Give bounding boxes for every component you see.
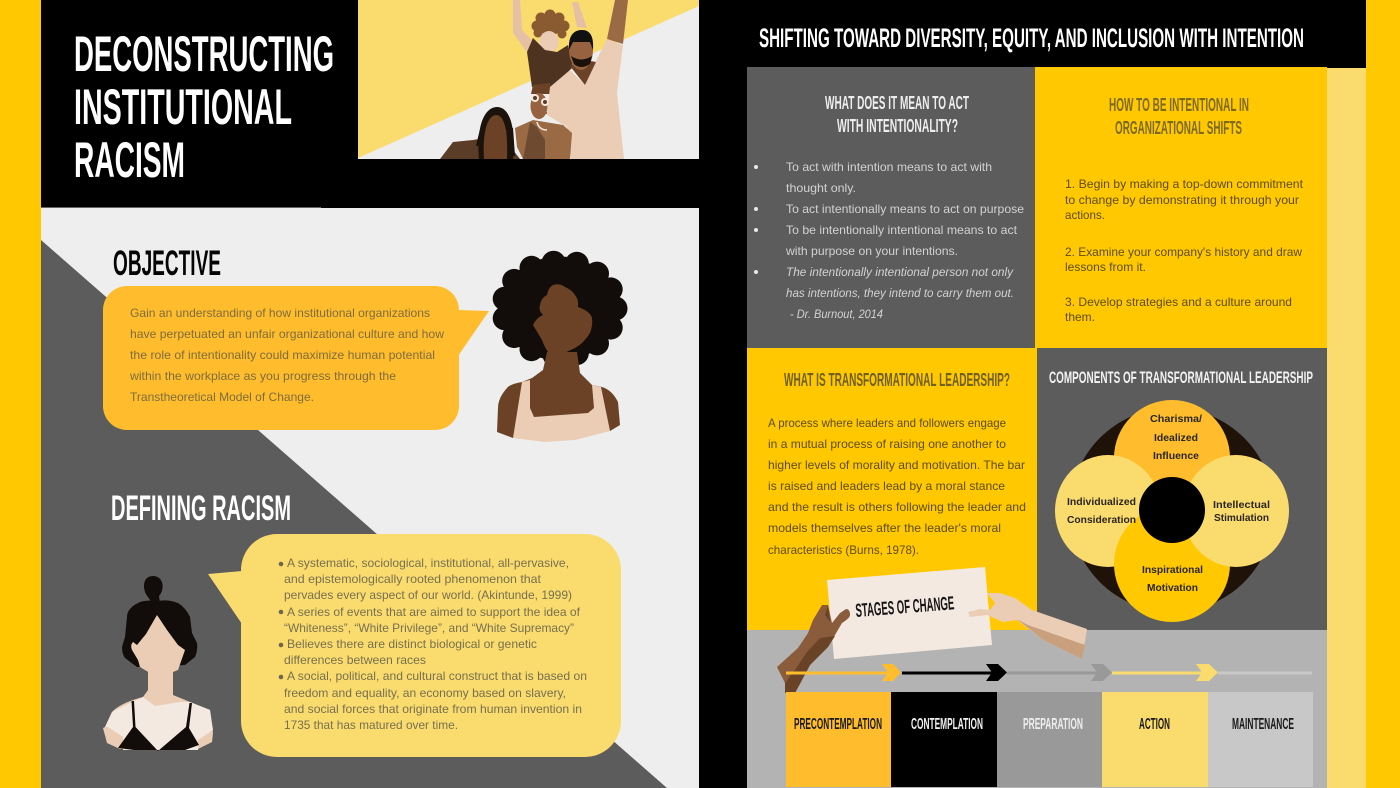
panel: what is transformational leadership: characteristics (Burns, 1978).	[768, 543, 919, 557]
diagram: four overlapping circles: Charisma/	[1150, 414, 1202, 425]
illustration: group of people with raised arms	[358, 0, 699, 159]
panel: what does it mean to act with intentionality: has intentions, they intend to carry them out.	[786, 286, 1014, 300]
decorative side strip	[1327, 68, 1366, 788]
callout: defining racism speech bubble: A social, political, and cultural construct that is based on	[287, 669, 587, 683]
panel: how to be intentional: 3. Develop strategies and a culture around	[1065, 295, 1292, 309]
panel: what is transformational leadership: higher levels of morality and motivation. The bar	[768, 458, 1025, 472]
panel: how to be intentional: 2. Examine your company's history and draw	[1065, 245, 1302, 259]
card: stages of change: STAGES OF CHANGE	[855, 593, 955, 622]
panel: how to be intentional: ORGANIZATIONAL SHIFTS	[1115, 118, 1242, 138]
panel: what does it mean to act with intentionality: WITH INTENTIONALITY?	[837, 116, 958, 136]
callout: objective speech bubble: have perpetuated an unfair organizational culture and how	[130, 327, 444, 341]
callout: defining racism speech bubble: A systematic, sociological, institutional, all-pervasive,	[287, 556, 569, 570]
illustration: woman with afro	[493, 251, 628, 442]
panel: what is transformational leadership: WHAT IS TRANSFORMATIONAL LEADERSHIP?	[784, 370, 1010, 390]
stage boxes: MAINTENANCE	[1232, 716, 1294, 733]
panel: what does it mean to act with intentionality: To be intentionally intentional means to act	[786, 223, 1018, 237]
panel: what is transformational leadership: and the result is others following the leader and	[768, 500, 1026, 514]
panel: how to be intentional	[1035, 67, 1327, 348]
panel: how to be intentional: 1. Begin by making a top-down commitment	[1065, 177, 1304, 191]
callout: defining racism speech bubble: freedom and equality, an economy based on slavery,	[284, 686, 566, 700]
diagram: four overlapping circles: Individualized	[1067, 497, 1136, 508]
panel: what is transformational leadership: in a mutual process of raising one another to	[768, 437, 1006, 451]
title: DECONSTRUCTING	[74, 26, 334, 82]
heading: defining racism: DEFINING RACISM	[111, 489, 291, 528]
panel: what does it mean to act with intentionality: To act with intention means to act with	[786, 160, 992, 174]
panel: how to be intentional: actions.	[1065, 208, 1105, 222]
panel: what is transformational leadership: A process where leaders and followers engage	[768, 416, 1006, 430]
diagram: four overlapping circles: Stimulation	[1214, 513, 1269, 524]
callout: defining racism speech bubble: and epistemologically rooted phenomenon that	[284, 572, 542, 586]
panel: what is transformational leadership	[747, 348, 1037, 630]
heading: objective: OBJECTIVE	[113, 244, 221, 283]
diagram: four overlapping circles: Influence	[1153, 451, 1199, 462]
illustration: woman with hair bun	[103, 576, 213, 751]
panel: what is transformational leadership: is raised and leaders lead by a moral stance	[768, 479, 1005, 493]
callout: objective speech bubble: Gain an understanding of how institutional organizations	[130, 306, 430, 320]
panel: what does it mean to act with intentionality	[747, 67, 1035, 348]
callout: defining racism speech bubble: and social forces that originate from human invention in	[284, 702, 582, 716]
title: INSTITUTIONAL	[74, 79, 292, 135]
diagram: four overlapping circles	[1055, 400, 1289, 622]
callout: objective speech bubble	[103, 286, 489, 430]
panel: how to be intentional: them.	[1065, 310, 1095, 324]
arrow timeline	[786, 664, 1312, 681]
panel: what does it mean to act with intentionality: The intentionally intentional person not only	[786, 265, 1014, 279]
card: stages of change	[827, 567, 992, 659]
callout: defining racism speech bubble: 1735 that has matured over time.	[284, 718, 458, 732]
stage boxes: ACTION	[1139, 716, 1170, 733]
icon: left hand holding the card	[777, 605, 850, 693]
callout: defining racism speech bubble	[208, 534, 621, 757]
panel: what does it mean to act with intentionality: WHAT DOES IT MEAN TO ACT	[825, 93, 969, 113]
diagram: four overlapping circles: Inspirational	[1142, 565, 1203, 576]
panel: how to be intentional: HOW TO BE INTENTIONAL IN	[1109, 95, 1249, 115]
stage boxes: CONTEMPLATION	[911, 716, 983, 733]
panel: what does it mean to act with intentionality: with purpose on your intentions.	[785, 244, 958, 258]
panel: components of transformational leadership	[1037, 348, 1327, 630]
panel: title block	[41, 0, 699, 208]
callout: defining racism speech bubble: pervades every aspect of our world. (Akintunde, 1999)	[284, 588, 572, 602]
panel: what is transformational leadership: models themselves after the leader's moral	[768, 521, 1001, 535]
callout: defining racism speech bubble: differences between races	[284, 653, 426, 667]
stage boxes	[786, 692, 1313, 787]
diagram: four overlapping circles: Intellectual	[1213, 500, 1270, 511]
callout: objective speech bubble: within the workplace as you progress through the	[129, 369, 396, 383]
panel: how to be intentional: to change by demonstrating it through your	[1065, 193, 1299, 207]
callout: objective speech bubble: the role of intentionality could maximize human potential	[130, 348, 435, 362]
stage boxes: PREPARATION	[1023, 716, 1083, 733]
callout: defining racism speech bubble: Believes there are distinct biological or genetic	[287, 637, 537, 651]
panel: stages of change	[747, 567, 1327, 788]
callout: objective speech bubble: Transtheoretical Model of Change.	[130, 390, 314, 404]
panel: left content background	[41, 207, 699, 788]
diagram: four overlapping circles: Motivation	[1147, 583, 1198, 594]
diagram: four overlapping circles: Idealized	[1154, 433, 1198, 444]
panel: what does it mean to act with intentionality: To act intentionally means to act on purpose	[786, 202, 1024, 216]
icon: right hand holding the card	[968, 593, 1087, 659]
title	[74, 26, 334, 188]
panel: how to be intentional: lessons from it.	[1065, 260, 1146, 274]
panel: what does it mean to act with intentionality: - Dr. Burnout, 2014	[790, 307, 883, 321]
title: RACISM	[74, 132, 185, 188]
panel: what does it mean to act with intentionality: thought only.	[786, 181, 856, 195]
stage boxes: PRECONTEMPLATION	[794, 716, 882, 733]
diagram: four overlapping circles: Consideration	[1067, 515, 1136, 526]
callout: defining racism speech bubble: “Whiteness”, “White Privilege”, and “White Supremacy”	[284, 621, 574, 635]
callout: defining racism speech bubble: A series of events that are aimed to support the idea of	[287, 605, 581, 619]
